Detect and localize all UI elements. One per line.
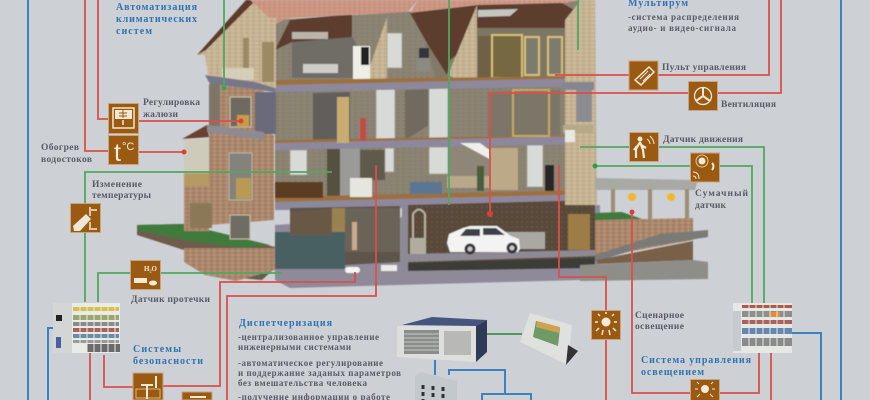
text: motion sensor: Датчик движения (663, 135, 743, 145)
touch panel (520, 313, 578, 365)
text: lighting control system: Система управления (641, 355, 752, 366)
icon: gutter heating: t (114, 139, 121, 167)
text: dispatching: -автоматическое регулирование (238, 358, 383, 368)
upper roof (410, 0, 580, 13)
interior walls (292, 28, 578, 197)
illustration: cutaway house (137, 0, 708, 288)
text: security systems (133, 344, 203, 367)
text: dispatching: и поддержание заданых параметров (238, 368, 401, 378)
text: climate automation: климатических (116, 14, 197, 25)
text: blinds: жалюзи (143, 110, 179, 120)
text: scenario lighting (635, 311, 684, 332)
icon: dusk sensor (690, 153, 720, 182)
control cabinet (415, 372, 457, 400)
text: climate automation: систем (116, 26, 152, 37)
text: lighting control system: освещением (641, 367, 704, 378)
text: temperature change: температуры (92, 191, 152, 201)
text: multiroom (628, 0, 739, 33)
text: scenario lighting: Сценарное (635, 311, 684, 321)
text: gutter heating: водостоков (41, 155, 92, 165)
text: dusk sensor (695, 188, 749, 211)
icon: leak sensor (130, 260, 160, 290)
basement (408, 200, 595, 266)
icon: ventilation (688, 82, 718, 110)
text: lighting control system (641, 355, 752, 378)
text: security systems: Системы (133, 344, 181, 355)
foundation (275, 205, 600, 288)
right controller (733, 303, 792, 353)
floor slabs (275, 76, 595, 210)
text: dispatching: инженерными системами (238, 342, 351, 352)
text: dusk sensor: Сумачный (695, 188, 749, 199)
room furniture and people (275, 90, 554, 198)
wiring: green lines (85, 0, 764, 334)
left tower (197, 0, 276, 92)
icon: gutter heating (108, 136, 138, 167)
attic walls and furniture (303, 5, 588, 83)
text: ventilation: Вентиляция (721, 100, 776, 110)
wiring: red lines (85, 0, 781, 400)
connection dots (182, 86, 634, 217)
text: security systems: безопасности (133, 356, 203, 367)
text: temperature change (92, 180, 152, 201)
text: dispatching: Диспетчеризация (239, 318, 333, 329)
text: multiroom: -система распределения (628, 12, 739, 22)
icon: remote control (629, 61, 658, 90)
icon: blinds control (108, 104, 138, 134)
text: remote control: Пульт управления (662, 63, 746, 73)
text: dusk sensor: датчик (695, 201, 727, 211)
icon: security second (182, 392, 212, 400)
text: temperature change: Изменение (92, 180, 142, 190)
icon: temperature change (70, 204, 100, 232)
text: dispatching (238, 318, 401, 400)
left controller (53, 303, 120, 353)
right tower (565, 0, 597, 205)
house interior (275, 0, 590, 210)
text: climate automation (116, 2, 198, 37)
text: multiroom: аудио- и видео-сигнала (628, 23, 736, 33)
text: blinds: Регулировка (143, 98, 200, 108)
text: scenario lighting: освещение (635, 322, 684, 332)
icon: lighting control (690, 380, 720, 400)
server (397, 317, 487, 362)
text: leak sensor: Датчик протечки (131, 295, 211, 305)
text: dispatching: -централизованное управление (238, 332, 379, 342)
car (447, 226, 520, 254)
icon: motion sensor (630, 132, 658, 162)
text: dispatching: без вмешательства человека (238, 378, 368, 388)
right terrace (580, 178, 708, 281)
text: blinds (143, 98, 200, 120)
text: gutter heating: Обогрев (41, 142, 79, 153)
text: gutter heating (41, 142, 92, 165)
icon: scenario lighting (592, 310, 620, 340)
icon: security (133, 373, 163, 400)
icon: gutter heating: °C (122, 141, 134, 153)
windows (290, 33, 543, 187)
text: climate automation: Автоматизация (116, 2, 198, 13)
icon: leak sensor: H₂O (144, 265, 158, 273)
left terrace ledge (137, 224, 275, 281)
